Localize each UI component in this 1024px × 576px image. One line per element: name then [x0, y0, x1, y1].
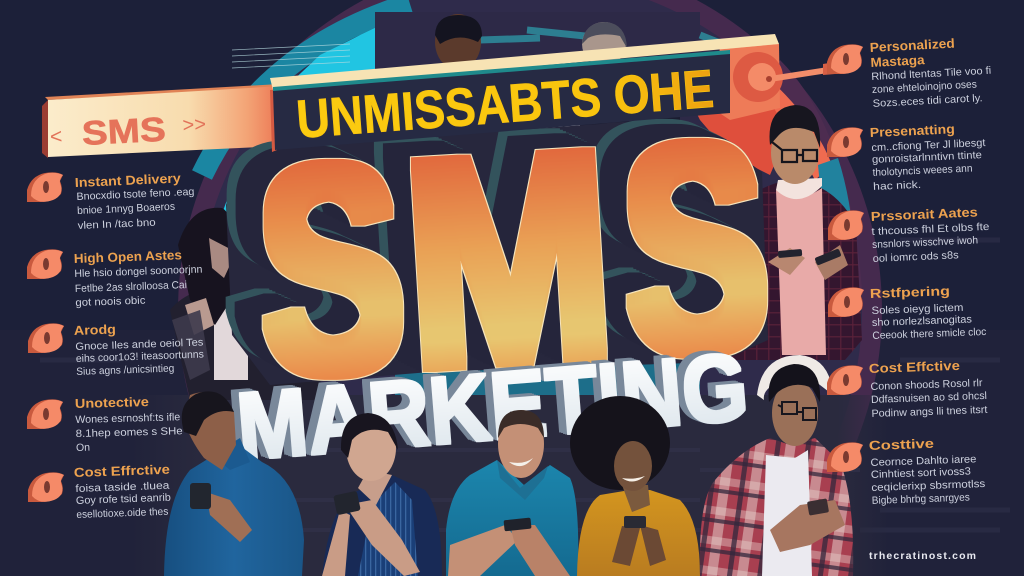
item: personalized message: Rlhond ltentas Tile voo fi [871, 65, 991, 83]
item: costtive: Cinhtiest sort ivoss3 [871, 465, 971, 481]
right column benefits [827, 34, 993, 507]
item: arodg: Gnoce Iles ande oeiol Tes [75, 336, 204, 353]
item: costtive: Ceornce Dahlto iaree [870, 453, 977, 469]
person 5: white halo [757, 355, 833, 400]
marketing 3d word: MARKETING [233, 333, 752, 481]
item: rstfpering: Rstfpering [870, 283, 950, 301]
item: arodg: Sius agns /unicsintieg [76, 363, 175, 378]
item: high open rates: Hle hsio dongel soonoorjnn [74, 264, 203, 280]
item: high open rates [27, 247, 204, 309]
item: rstfpering: Soles oieyg lictem [871, 302, 964, 317]
item: cost effective right [827, 357, 988, 420]
item: presenatting: gonroistarlnntivn ttinte [872, 149, 982, 166]
sms banner text: SMS [81, 111, 167, 153]
item: arodg: eihs coor1o3! iteasoortunns [76, 348, 204, 365]
item: high open rates: Fetlbe 2as slrolloosa Cai [75, 279, 187, 295]
item: personal rates: Prssorait Aates [871, 204, 978, 224]
top right coral panel [715, 38, 783, 120]
person 5: plaid shirt [700, 364, 853, 576]
person 1: blue sweater [164, 391, 304, 576]
item: cost effective right: Podinw angs lli tnes itsrt [871, 404, 988, 420]
left column benefits [27, 170, 204, 521]
background person: man right [530, 22, 680, 340]
person 3: teal polo [446, 410, 578, 576]
item: presenatting: Presenatting [869, 121, 955, 140]
sms banner text [49, 109, 207, 155]
item: personalized message: Sozs.eces tidi carot ly. [872, 92, 983, 110]
item: rstfpering: Ceeook there smicle cloc [872, 326, 987, 342]
item: rstfpering [828, 282, 987, 342]
item: unotective: Wones esrnoshf:ts ifle [75, 411, 181, 426]
item: cost effective right: Cost Effctive [869, 358, 960, 376]
person 2: navy dress [322, 413, 442, 576]
item: presenatting: hac nick. [873, 179, 921, 193]
item: cost effective left [28, 462, 172, 521]
item: high open rates: got noois obic [75, 295, 146, 309]
dark backing behind title letters [226, 122, 768, 385]
item: personalized message [827, 34, 993, 110]
item: cost effective right: Ddfasnuisen ao sd ohcsl [871, 390, 987, 406]
item: cost effective right: Conon shoods Rosol rlr [870, 377, 983, 393]
item: personal rates: ool iomrc ods s8s [872, 249, 959, 265]
background circular arcs [130, 0, 890, 576]
item: cost effective left: Cost Effrctive [74, 462, 170, 480]
item: personalized message: Personalized [869, 36, 955, 55]
item: unotective: 8.1hep eomes s SHe [76, 425, 183, 440]
letter S right: S [614, 79, 777, 417]
item: rstfpering: sho norlezlsanogitas [872, 313, 972, 329]
item: presenatting [827, 120, 987, 193]
item: presenatting: tholotyncis weees ann [872, 163, 973, 179]
item: personal rates: snsnlors wisschve iwoh [872, 234, 978, 251]
item: personalized message: Mastaga [870, 52, 926, 70]
background person: woman with phone [170, 208, 322, 400]
connector [748, 62, 835, 91]
headline text: UNMISSABTS OHE [294, 59, 716, 150]
item: unotective: Unotective [75, 394, 149, 411]
item: arodg [28, 319, 204, 378]
item: cost effective left: esellotioxe.oide thes [76, 506, 169, 521]
letter S left: S [250, 100, 413, 438]
sms banner text: < [49, 125, 63, 149]
item: instant delivery: bnioe 1nnyg Boaeros [77, 201, 175, 217]
headline banner [270, 34, 779, 152]
item: instant delivery [27, 170, 196, 232]
item: presenatting: cm..cfiong Ter Jl libesgt [871, 137, 986, 154]
big 3d title SMS [250, 79, 777, 438]
item: costtive: ceqiclerixp sbsrmotlss [871, 478, 986, 494]
footer url: trhecratinost.com [869, 550, 976, 562]
background person: man left [368, 14, 530, 340]
item: costtive [827, 434, 986, 507]
item: cost effective left: foisa taside .tluea [75, 480, 170, 495]
item: cost effective left: Goy rofe tsid eanrib [76, 492, 171, 507]
item: costtive: Bigbe bhrbg sanrgyes [872, 492, 970, 507]
item: high open rates: High Open Astes [74, 247, 182, 266]
item: instant delivery: Bnocxdio tsote feno .eag [76, 186, 195, 203]
person 4: mustard top [570, 396, 700, 576]
item: costtive: Costtive [869, 436, 934, 453]
item: unotective [27, 393, 183, 454]
sms banner [42, 84, 282, 158]
item: personalized message: zone ehteloinojno oses [872, 78, 977, 96]
item: personal rates [828, 204, 991, 265]
letter M: M [397, 88, 621, 430]
item: unotective: On [76, 442, 90, 454]
item: arodg: Arodg [74, 322, 116, 338]
item: instant delivery: vlen In /tac bno [77, 217, 156, 232]
item: personal rates: t thcouss fhl Et olbs fte [871, 221, 990, 238]
sms banner text: >> [182, 114, 207, 137]
background person: man with glasses [705, 105, 862, 360]
item: instant delivery: Instant Delivery [75, 170, 182, 190]
